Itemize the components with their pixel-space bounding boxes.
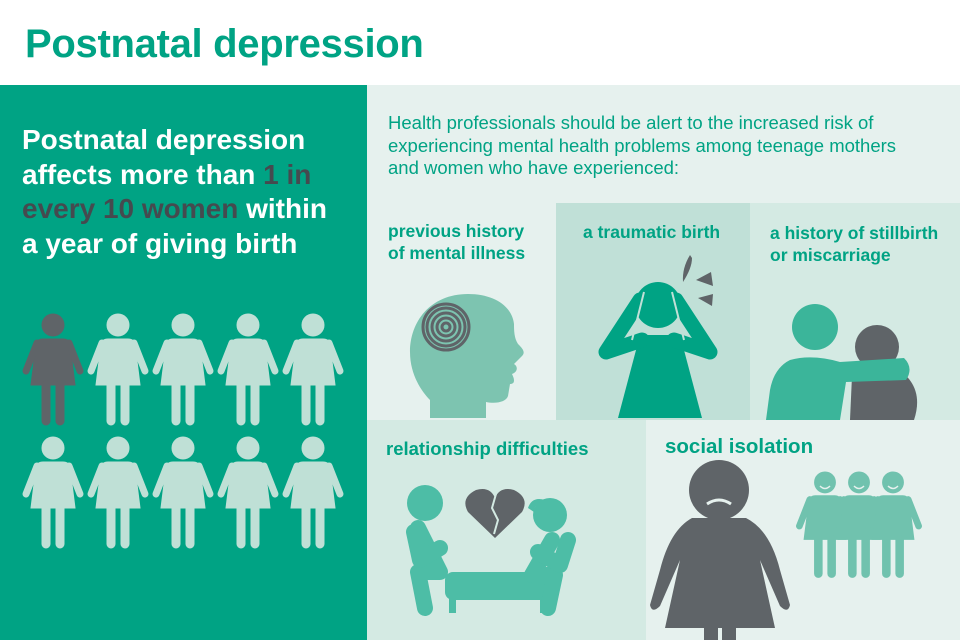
label: social isolation: social isolation <box>665 435 813 458</box>
icon: head with spiral <box>410 294 524 418</box>
icon: traumatic birth figure <box>606 255 713 418</box>
text: main stat: Postnatal depression affects more than 1 in every 10 women within a year of giving birth <box>22 124 327 258</box>
icon: comforting figures <box>766 304 917 420</box>
panel: right background <box>364 85 960 640</box>
label: traumatic birth: a traumatic birth <box>583 222 720 242</box>
icon: women 1 of 10 <box>26 314 340 548</box>
label: stillbirth: a history of stillbirth <box>770 223 938 243</box>
icon: isolated woman and group <box>650 460 919 640</box>
label: stillbirth <box>770 223 938 265</box>
label: previous history: previous history <box>388 221 524 241</box>
icon: relationship difficulties <box>407 485 568 613</box>
panel: left stat <box>0 85 364 640</box>
title: Postnatal depression <box>25 22 424 66</box>
label: previous history <box>388 221 525 263</box>
label: relationship difficulties: relationship difficulties <box>386 438 588 459</box>
text: intro: Health professionals should be alert to the increased risk of experiencing mental health problems among teenage mothers and women who have experienced: <box>388 112 896 178</box>
label: stillbirth: or miscarriage <box>770 245 891 265</box>
label: previous history: of mental illness <box>388 243 525 263</box>
